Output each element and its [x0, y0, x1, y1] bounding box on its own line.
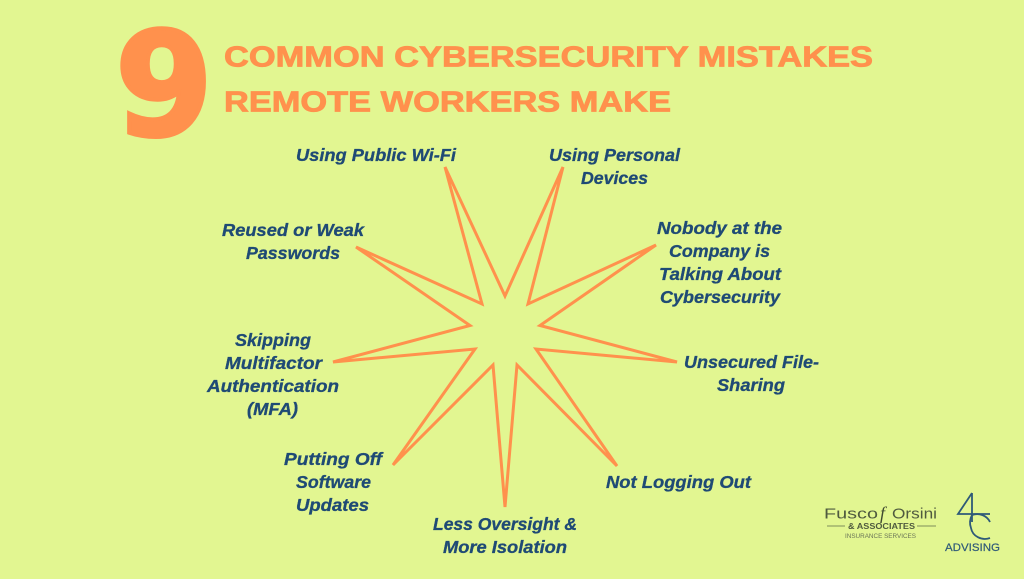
nine-point star outline [333, 167, 677, 507]
label: nobody at the company: Talking About [659, 264, 782, 284]
logo: fusco orsini and associates [824, 503, 937, 540]
logo: fusco orsini and associates: Orsini [892, 506, 937, 522]
logo: fusco orsini and associates: INSURANCE SERVICES [845, 533, 916, 540]
label: skipping mfa: (MFA) [247, 399, 298, 419]
label: nobody at the company: Company is [669, 241, 770, 261]
label: using personal devices: Devices [581, 168, 648, 188]
label: putting off software updates: Software [296, 472, 371, 492]
label: nobody at the company [657, 218, 782, 307]
label: reused or weak passwords: Reused or Weak [222, 220, 365, 240]
label: reused or weak passwords: Passwords [246, 243, 340, 263]
label: reused or weak passwords [222, 220, 365, 263]
title: COMMON CYBERSECURITY MISTAKES [224, 42, 873, 74]
label: unsecured file-sharing: Unsecured File- [684, 352, 819, 372]
label: less oversight: Less Oversight & [433, 514, 577, 534]
title [224, 42, 873, 118]
label: putting off software updates: Updates [296, 495, 369, 515]
label: putting off software updates [284, 449, 384, 515]
logo: 4c advising [945, 493, 1000, 554]
title: REMOTE WORKERS MAKE [224, 86, 671, 118]
label: skipping mfa: Skipping [235, 330, 311, 350]
label: skipping mfa [206, 330, 339, 419]
label: skipping mfa: Authentication [206, 376, 339, 396]
label: skipping mfa: Multifactor [225, 353, 323, 373]
logo: fusco orsini and associates: & ASSOCIATES [848, 521, 915, 531]
label: putting off software updates: Putting Off [284, 449, 384, 469]
label: nobody at the company: Nobody at the [657, 218, 782, 238]
logo: fusco orsini and associates: f [880, 503, 888, 523]
label: using personal devices: Using Personal [549, 145, 681, 165]
label: using public wi-fi: Using Public Wi-Fi [296, 145, 457, 165]
label: nobody at the company: Cybersecurity [660, 287, 781, 307]
label: less oversight: More Isolation [443, 537, 567, 557]
label: less oversight [433, 514, 577, 557]
big number 9: 9 [115, 1, 213, 169]
label: using personal devices [549, 145, 681, 188]
label: unsecured file-sharing [684, 352, 819, 395]
label: not logging out: Not Logging Out [606, 472, 752, 492]
label: unsecured file-sharing: Sharing [717, 375, 785, 395]
logo: fusco orsini and associates: Fusco [824, 506, 878, 522]
logo: 4c advising: ADVISING [945, 542, 1000, 554]
